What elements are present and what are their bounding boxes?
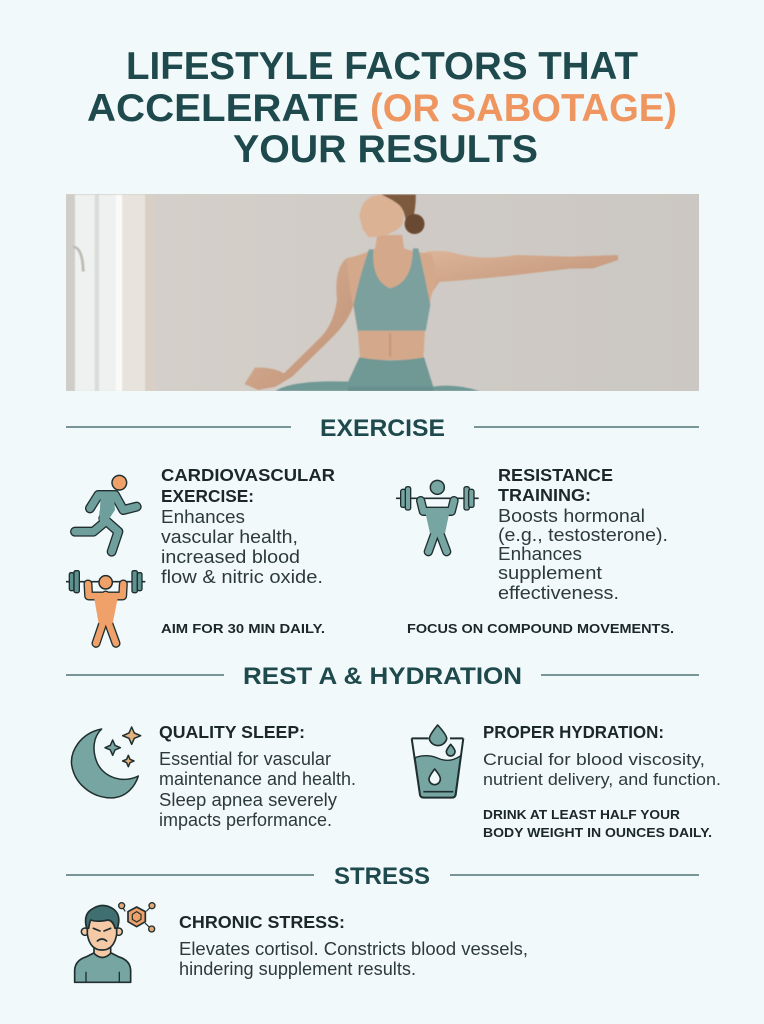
text block: proper hydration: nutrient delivery, and function. xyxy=(483,770,721,789)
photo: woman in seated yoga pose by a window xyxy=(66,194,699,391)
text block: resistance training xyxy=(407,465,674,636)
text block: resistance training: TRAINING: xyxy=(498,485,591,505)
text block: chronic stress: hindering supplement results. xyxy=(179,959,416,979)
text block: quality sleep xyxy=(159,722,356,830)
outstretched arm xyxy=(425,251,618,297)
text block: quality sleep: Essential for vascular xyxy=(159,749,331,769)
text block: quality sleep: QUALITY SLEEP: xyxy=(159,722,305,742)
text block: resistance training: Enhances xyxy=(498,544,582,564)
head xyxy=(359,195,404,237)
text block: resistance training: Boosts hormonal xyxy=(498,506,645,526)
text block: cardiovascular exercise: increased blood xyxy=(161,547,300,567)
sports bra xyxy=(354,248,430,331)
text block: proper hydration: DRINK AT LEAST HALF YOUR xyxy=(483,807,681,822)
icon: teal weightlifter xyxy=(396,480,479,552)
text block: resistance training: RESISTANCE xyxy=(498,465,613,485)
text block: cardiovascular exercise xyxy=(161,465,335,636)
text block: resistance training: supplement xyxy=(498,563,602,583)
text block: chronic stress xyxy=(179,912,528,979)
text block: cardiovascular exercise: EXERCISE: xyxy=(161,486,254,506)
text block: cardiovascular exercise: CARDIOVASCULAR xyxy=(161,465,335,485)
text block: cardiovascular exercise: Enhances xyxy=(161,507,245,527)
section heading: rest and hydration: REST A & HYDRATION xyxy=(243,663,522,690)
text block: quality sleep: impacts performance. xyxy=(159,810,332,830)
text block: proper hydration xyxy=(483,722,721,840)
title: ACCELERATE xyxy=(87,87,359,130)
text block: proper hydration: Crucial for blood viscosity, xyxy=(483,750,705,769)
section heading: stress: STRESS xyxy=(334,863,430,890)
icon: orange weightlifter xyxy=(66,571,145,643)
text block: cardiovascular exercise: AIM FOR 30 MIN DAILY. xyxy=(161,621,325,636)
text block: chronic stress: Elevates cortisol. Constricts blood vessels, xyxy=(179,939,528,959)
text block: cardiovascular exercise: vascular health, xyxy=(161,527,298,547)
text block: quality sleep: Sleep apnea severely xyxy=(159,790,337,810)
text block: resistance training: FOCUS ON COMPOUND MOVEMENTS. xyxy=(407,621,674,636)
text block: cardiovascular exercise: flow & nitric oxide. xyxy=(161,567,323,587)
text block: proper hydration: BODY WEIGHT IN OUNCES DAILY. xyxy=(483,825,712,840)
leggings xyxy=(276,357,480,391)
lowered arm xyxy=(245,258,359,390)
text block: proper hydration: PROPER HYDRATION: xyxy=(483,722,664,742)
title: YOUR RESULTS xyxy=(233,128,538,171)
text block: chronic stress: CHRONIC STRESS: xyxy=(179,912,345,932)
section heading: exercise: EXERCISE xyxy=(320,415,445,442)
icon: moon and stars xyxy=(71,727,141,798)
icon: runner xyxy=(75,475,137,552)
title xyxy=(87,45,677,171)
title: (OR SABOTAGE) xyxy=(370,87,677,130)
icon: stressed person with cortisol molecule xyxy=(75,903,155,982)
text block: quality sleep: maintenance and health. xyxy=(159,769,356,789)
window and curtain xyxy=(66,195,155,391)
torso xyxy=(346,235,435,360)
icon: glass of water xyxy=(412,725,463,798)
text block: resistance training: effectiveness. xyxy=(498,583,619,603)
title: LIFESTYLE FACTORS THAT xyxy=(126,45,638,88)
text block: resistance training: (e.g., testosterone). xyxy=(498,525,668,545)
